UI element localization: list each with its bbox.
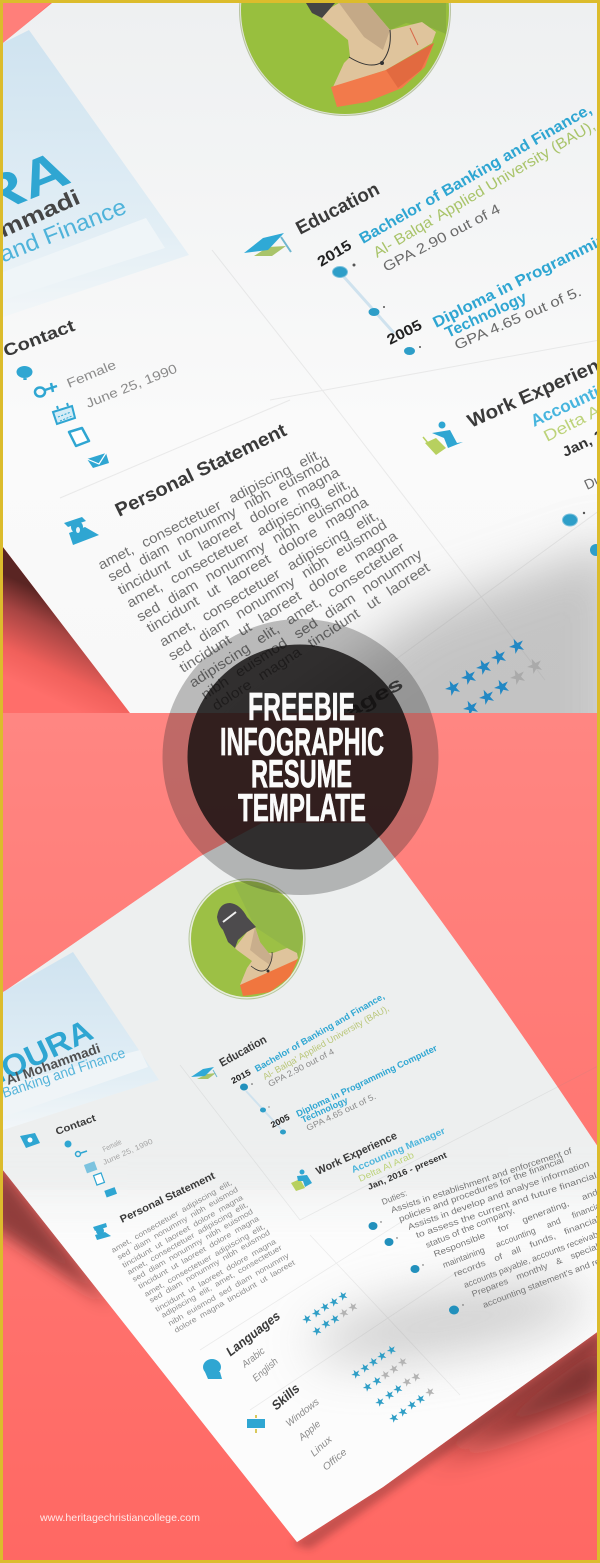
duties list — [380, 1145, 600, 1310]
name: Al Mohammadi: Al Mohammadi — [4, 1041, 102, 1088]
watermark url: www.heritagechristiancollege.com — [39, 1512, 200, 1524]
timeline — [332, 264, 421, 355]
university: Al- Balqa' Applied University (BAU), — [261, 1003, 391, 1082]
dividers — [180, 1065, 600, 1410]
paragraph: amet, consectetuer adipiscing elit, — [110, 1178, 234, 1255]
dividers — [60, 250, 600, 680]
paper shading fold — [307, 1268, 593, 1376]
top corner background — [3, 3, 50, 43]
paragraph: sed diam nonummy nibh euismod — [165, 516, 389, 664]
dates: Jan, 2016 - present — [366, 1150, 448, 1192]
section: education — [244, 101, 600, 355]
duties list: Prepares monthly & special — [470, 1241, 600, 1299]
section: personal statement — [93, 1170, 297, 1335]
section: skills — [247, 1344, 436, 1473]
icon: graduation cap — [191, 1067, 217, 1079]
GPA 2: GPA 4.65 out of 5. — [305, 1091, 377, 1133]
icon: phone — [94, 1173, 104, 1185]
badge: outer translucent circle — [162, 619, 438, 895]
panel: top close-up of resume — [3, 3, 597, 713]
paragraph: sed diam nonummy nibh euismod — [105, 454, 332, 585]
heading: Personal Statement: Personal Statement — [112, 420, 291, 521]
duties list: accounting statement's and re — [481, 1256, 600, 1310]
stars: language ratings — [443, 636, 545, 717]
paragraph: sed diam nonummy nibh euismod — [116, 1185, 240, 1262]
panel: bottom full resume view — [0, 713, 600, 1563]
year 2005: 2005 — [385, 318, 425, 349]
duties list: policies and procedures for the financial — [397, 1155, 565, 1224]
section: work experience — [291, 1126, 600, 1314]
stars: language ratings — [301, 1290, 359, 1337]
icon: calendar — [84, 1161, 97, 1173]
paragraph: sed diam nonummy nibh euismod — [130, 1207, 255, 1284]
shadow: left edge — [0, 1150, 110, 1305]
icon: contact card — [20, 1133, 40, 1148]
icon: location — [64, 1140, 72, 1148]
timeline — [240, 1083, 286, 1134]
stars: skill ratings — [350, 1344, 436, 1424]
name block background — [3, 952, 159, 1130]
duties list: Assists in develop and analyse information — [406, 1158, 591, 1232]
duties list: Duties: — [380, 1188, 408, 1207]
degree 1: Bachelor of Banking and Finance, — [253, 991, 386, 1074]
paragraph: amet, consectetuer adipiscing elit, — [95, 445, 324, 573]
badge title: TEMPLATE — [238, 787, 366, 830]
paragraph: tincidunt ut laoreet dolore magna — [120, 1192, 245, 1270]
icon: location — [16, 366, 32, 380]
duties list: to assess the current and future financial — [414, 1170, 598, 1240]
text: skill names: Office — [321, 1447, 350, 1473]
badge title: FREEBIE — [248, 686, 355, 729]
paragraph: tincidunt ut laoreet dolore magna — [154, 1236, 278, 1314]
text: skill names: Linux — [309, 1434, 335, 1459]
paragraph: amet, consectetuer adipiscing elit, — [126, 1200, 250, 1277]
section: contact — [1, 316, 179, 468]
section: personal statement — [64, 420, 433, 714]
paragraph: tincidunt ut laoreet dolore magna — [136, 1213, 261, 1291]
portrait: large cropped avatar — [239, 3, 451, 116]
text: skill names: Apple — [296, 1419, 323, 1444]
icon: graduate — [64, 517, 99, 545]
icon: graduate — [93, 1223, 111, 1240]
heading: Skills: Skills — [269, 1380, 302, 1414]
icon: mail — [87, 453, 109, 468]
paper sheet — [0, 823, 600, 1542]
degree 2 second line: Technology — [443, 289, 530, 342]
duties list: Responsible for generating, and — [432, 1187, 599, 1259]
paragraph — [95, 445, 433, 714]
section: education — [191, 991, 439, 1134]
section: languages — [203, 1290, 359, 1384]
text: skill names: Windows — [284, 1397, 322, 1429]
shadow: right edge — [430, 1328, 600, 1460]
icon: worker — [423, 422, 463, 455]
badge title — [220, 686, 384, 830]
GPA 1: GPA 2.90 out of 4 — [266, 1046, 336, 1089]
paragraph: sed diam nonummy nibh euismod — [134, 484, 361, 625]
text: skill names — [284, 1397, 350, 1473]
badge title: INFOGRAPHIC — [220, 721, 384, 764]
paragraph: sed diam nonummy nibh euismod — [148, 1228, 272, 1305]
GPA 2: GPA 4.65 out of 5. — [452, 283, 584, 353]
icon: gender — [76, 1151, 87, 1156]
heading: Languages: Languages — [270, 673, 407, 764]
bullets — [368, 1221, 464, 1314]
paragraph: dolore magna tincidunt ut laoreet — [172, 1257, 297, 1335]
paragraph: tincidunt ut laoreet dolore magna — [143, 494, 371, 636]
badge: inner dark circle — [188, 644, 412, 870]
paragraph: nibh euismod sed diam nonummy — [166, 1251, 291, 1328]
portrait: avatar — [185, 875, 310, 1005]
icon: calendar — [53, 403, 75, 424]
year 2015: 2015 — [315, 238, 355, 270]
icon: graduation cap — [244, 233, 291, 256]
duties list: accounts payable, accounts receivable — [462, 1227, 600, 1290]
icon: gender — [35, 383, 57, 396]
duties list: Assists in establishment and enforcement of — [389, 1145, 574, 1215]
paper shading — [333, 528, 597, 713]
icon: pencil — [247, 1415, 265, 1433]
icon: phone — [69, 428, 89, 446]
section: contact — [20, 1113, 154, 1197]
badge title: RESUME — [251, 753, 352, 796]
heading: Education: Education — [293, 179, 383, 239]
job title: Banking and Finance — [0, 1045, 128, 1102]
employer: Delta Al Arab — [357, 1150, 415, 1184]
degree 1: Bachelor of Banking and Finance, — [357, 101, 595, 247]
icon: worker — [291, 1170, 312, 1191]
section: work experience — [422, 362, 597, 556]
degree 2 second line: Technology — [300, 1095, 349, 1125]
heading: Work Experience: Work Experience — [314, 1130, 399, 1178]
duties list: records of all funds, financial — [452, 1214, 600, 1279]
paragraph: adipiscing elit, amet, consectetuer — [160, 1243, 284, 1320]
year 2015: 2015 — [229, 1067, 253, 1086]
bullets — [562, 512, 600, 556]
name block inner box — [43, 218, 164, 258]
year 2005: 2005 — [269, 1112, 291, 1130]
job title: Accounting Manager — [350, 1126, 447, 1176]
paper sheet — [3, 3, 600, 713]
paragraph: tincidunt ut laoreet dolore magna — [115, 464, 342, 598]
paragraph: adipiscing elit, amet, consectetuer — [186, 539, 408, 691]
text: date: June 25, 1990 — [101, 1137, 154, 1167]
text: Female: Female — [101, 1137, 123, 1154]
shadow: corner — [292, 1330, 600, 1549]
GPA 1: GPA 2.90 out of 4 — [380, 200, 503, 275]
duties list: maintaining accounting and financial — [441, 1200, 600, 1270]
heading: Education: Education — [218, 1034, 269, 1070]
paragraph: amet, consectetuer adipiscing elit, — [124, 475, 352, 611]
name block inner box — [3, 1050, 148, 1117]
text: Female: Female — [64, 357, 118, 391]
duties list: status of the company, — [424, 1205, 516, 1250]
paragraph: amet, consectetuer adipiscing elit, — [142, 1222, 267, 1299]
name block background — [3, 30, 189, 317]
heading: Languages: Languages — [224, 1307, 282, 1360]
paragraph: nibh euismod sed diam nonummy — [198, 546, 425, 703]
shadow beside paper edge — [3, 547, 130, 713]
degree 2: Diploma in Programming Computer — [295, 1043, 439, 1119]
paragraph: dolore magna tincidunt ut laoreet — [209, 559, 433, 714]
icon: head — [203, 1359, 222, 1379]
text: birth date: June 25, 1990 — [84, 361, 179, 411]
paragraph — [110, 1178, 297, 1335]
heading: Contact: Contact — [1, 316, 78, 361]
paragraph: tincidunt ut laoreet dolore magna — [176, 527, 400, 676]
text: English: English — [251, 1356, 281, 1384]
paragraph: amet, consectetuer adipiscing elit, — [156, 507, 381, 650]
heading: Personal Statement: Personal Statement — [118, 1170, 218, 1226]
text: Arabic: Arabic — [239, 1346, 267, 1371]
university: Al- Balqa' Applied University (BAU), — [370, 117, 599, 261]
heading: Contact: Contact — [54, 1113, 98, 1138]
icon: mail — [104, 1187, 117, 1197]
